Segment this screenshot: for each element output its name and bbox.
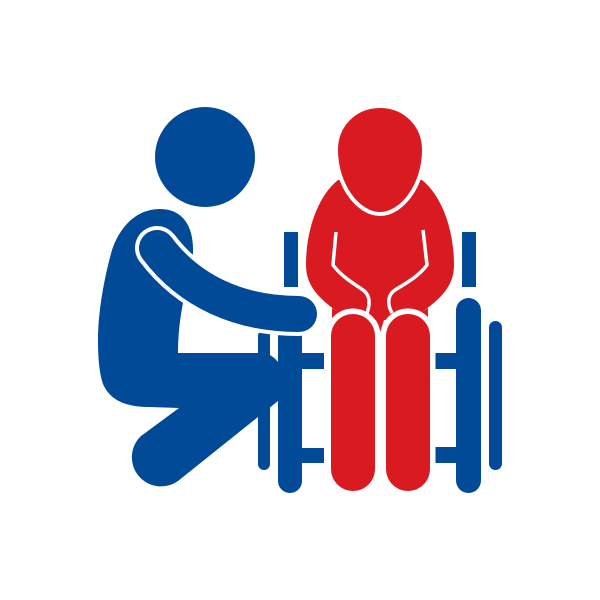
seated person: red figure	[306, 106, 454, 491]
arm lines	[333, 230, 427, 313]
wheelchair	[258, 232, 502, 493]
right leg	[386, 314, 430, 491]
carer arm	[157, 248, 299, 314]
carer arm outline	[157, 248, 299, 314]
left leg	[331, 314, 375, 491]
carer head	[155, 107, 255, 207]
torso	[306, 180, 454, 333]
carer: blue kneeling figure	[98, 107, 299, 486]
head outline	[336, 106, 424, 214]
carer body and legs	[98, 209, 278, 486]
